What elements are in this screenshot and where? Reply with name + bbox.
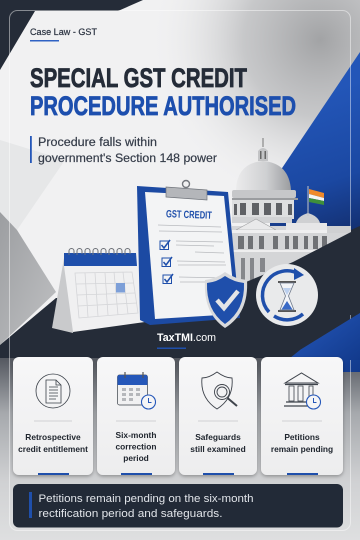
illustration: parliament building <box>232 138 351 286</box>
title: SPECIAL GST CREDIT <box>30 63 247 93</box>
subtitle: Procedure falls within <box>38 135 157 149</box>
subtitle: government's Section 148 power <box>38 151 217 165</box>
title <box>30 63 296 121</box>
brand mark: TaxTMI.com <box>157 332 216 344</box>
summary banner: rectification period and safeguards. <box>38 508 222 520</box>
icon: flag <box>308 186 324 216</box>
card 1: retrospective credit <box>13 357 93 475</box>
summary banner: Petitions remain pending on the six-month <box>38 493 254 505</box>
card 4: petitions pending: remain pending <box>271 444 333 454</box>
card 4: petitions pending: Petitions <box>284 432 320 442</box>
card 3: safeguards <box>179 357 257 475</box>
icon: blue shield with check <box>205 272 247 328</box>
illustration: GST credit clipboard <box>137 180 240 325</box>
summary banner <box>13 484 343 528</box>
card 4: petitions pending <box>261 357 343 475</box>
card 2: six-month correction: period <box>123 453 149 463</box>
icon: document cycle <box>36 374 70 408</box>
illustration: GST credit clipboard: GST CREDIT <box>166 208 213 222</box>
card 3: safeguards: Safeguards <box>195 432 241 442</box>
icon: shield with magnifier <box>202 372 237 409</box>
card 2: six-month correction: correction <box>116 442 156 452</box>
category label: Case Law - GST <box>30 27 97 38</box>
card 1: retrospective credit: credit entitlement <box>18 444 88 454</box>
checklist ticks <box>160 240 173 284</box>
dark ground over building base <box>190 226 360 315</box>
card 3: safeguards: still examined <box>190 444 246 454</box>
icon: calendar with clock <box>118 372 156 409</box>
icon: hourglass medallion <box>256 264 318 326</box>
subtitle <box>30 135 217 165</box>
icon: courthouse with clock <box>284 373 320 409</box>
brand mark <box>157 332 216 349</box>
card 1: retrospective credit: Retrospective <box>25 432 81 442</box>
card 2: six-month correction <box>97 357 175 475</box>
card 2: six-month correction: Six-month <box>116 430 156 440</box>
illustration: desk calendar <box>52 248 145 333</box>
